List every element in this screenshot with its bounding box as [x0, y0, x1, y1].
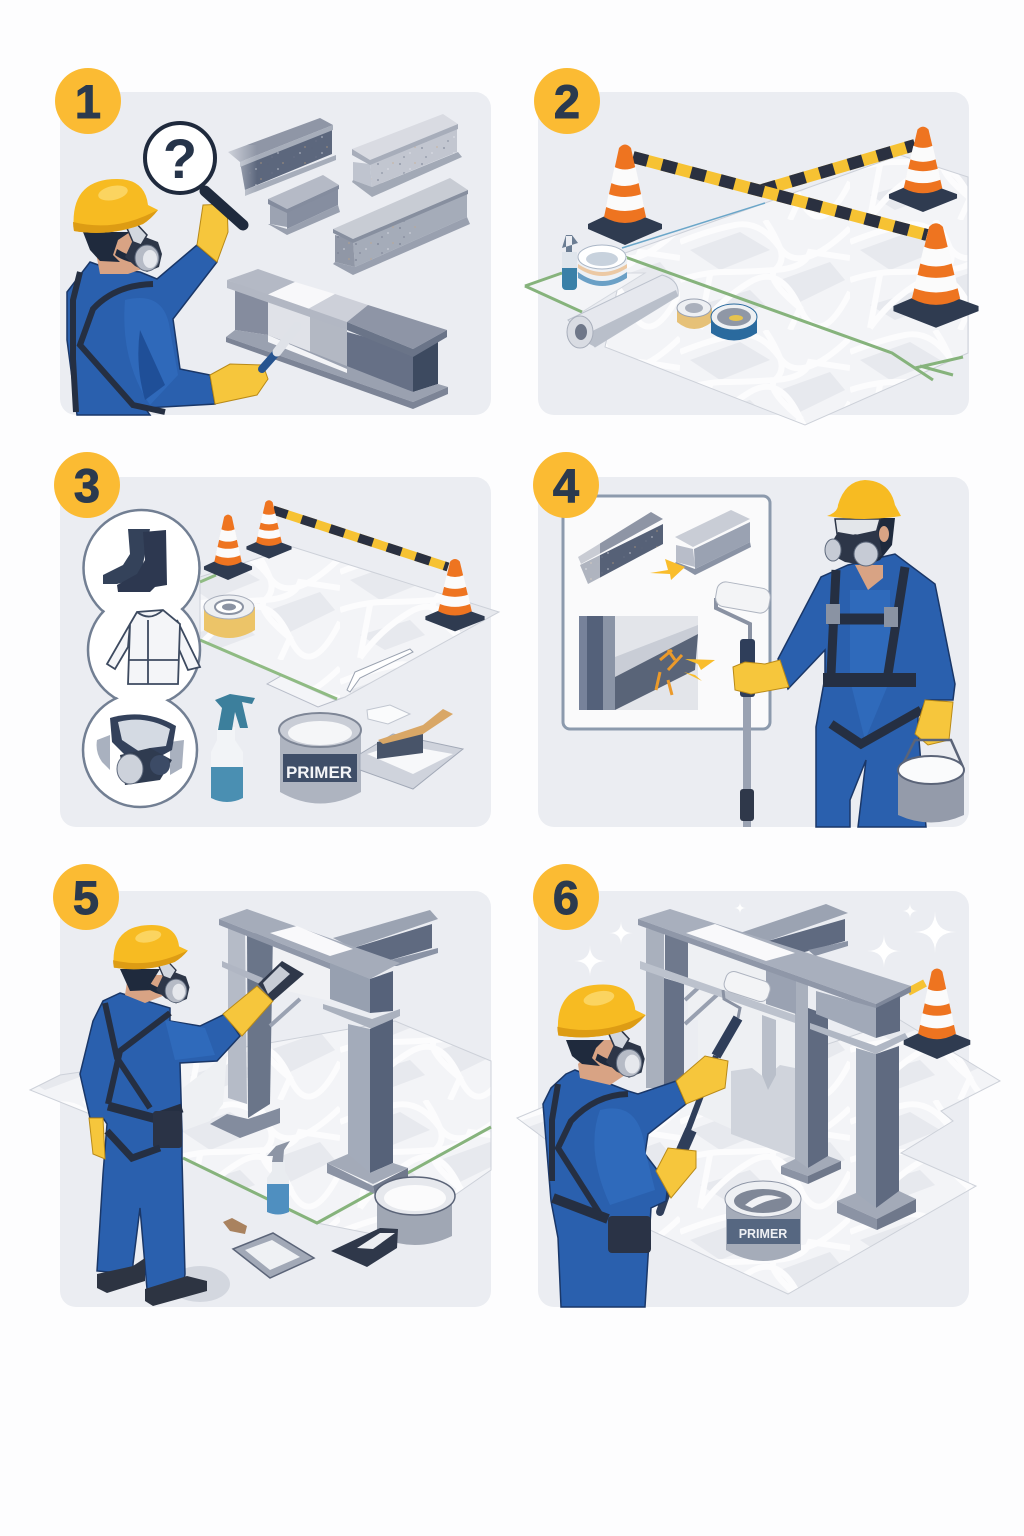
- sheet fold: [347, 649, 413, 692]
- respirator: [595, 1024, 645, 1078]
- main flange: [219, 909, 400, 979]
- badge 1: 1: [75, 75, 101, 128]
- spray bottle: [562, 235, 578, 290]
- badge 4: 4: [553, 459, 579, 512]
- steel frame: [638, 904, 916, 1230]
- panel: step 4 surface preparation: [538, 477, 969, 827]
- primer can: PRIMER: [739, 1227, 787, 1241]
- icon: respirator: [97, 714, 184, 785]
- cross beam: [740, 904, 848, 941]
- primer can: [279, 713, 361, 804]
- inset detail box: [563, 496, 770, 729]
- left column: [228, 926, 247, 1104]
- green tape line: [200, 575, 337, 699]
- green tape lines: [525, 257, 963, 380]
- cross beam: [333, 910, 438, 948]
- cone left: [588, 144, 662, 245]
- under sheet: [267, 665, 345, 707]
- barrier tape: [273, 510, 448, 567]
- tray with brush: [360, 705, 463, 789]
- cone 3: [425, 559, 485, 631]
- ppe circle outlines: [83, 510, 200, 807]
- beam closeup: [579, 616, 698, 710]
- right upper block: [816, 991, 876, 1038]
- steel frame: [210, 909, 438, 1194]
- small beam: [268, 175, 340, 235]
- badge 3: 3: [74, 459, 100, 512]
- scraper tool: [262, 326, 297, 369]
- circle fills merged: [84, 512, 198, 806]
- cone front right: [893, 223, 979, 328]
- small sheet under can: [525, 273, 645, 312]
- panel background: [538, 477, 969, 827]
- head: [97, 232, 145, 274]
- primer bucket: [375, 1177, 455, 1245]
- primed wall: [688, 941, 796, 1158]
- cone back right: [889, 127, 957, 212]
- panel background: [538, 891, 969, 1307]
- sparkles: [574, 902, 956, 977]
- panel background: [538, 92, 969, 415]
- badge 5: 5: [73, 871, 99, 924]
- worker inspecting: [67, 179, 268, 415]
- primer can: PRIMER: [286, 763, 352, 782]
- hard hat: [73, 179, 158, 233]
- draped cloth: [183, 1054, 227, 1131]
- panel: step 2 prepare area: [525, 92, 979, 425]
- roller: [660, 969, 772, 1212]
- right column: [856, 1048, 876, 1208]
- worker applying with brush: [80, 925, 273, 1306]
- boot shadow: [170, 1266, 230, 1302]
- badge 3: [54, 452, 120, 518]
- primer can: [725, 1181, 801, 1261]
- badge 6: [533, 864, 599, 930]
- badge 1: [55, 68, 121, 134]
- panel: step 6 roll primer: [517, 891, 1000, 1307]
- mid band: [640, 961, 798, 1024]
- panel: step 1 inspect steel: [60, 92, 491, 415]
- protective sheet: [517, 1020, 1000, 1294]
- main flange: [638, 909, 911, 1004]
- clean beam: [352, 114, 462, 197]
- head: [578, 1040, 625, 1085]
- gloves: [733, 660, 953, 745]
- icon: boots: [103, 529, 167, 592]
- rusty beam: [215, 118, 336, 200]
- tape roll: [204, 595, 255, 638]
- protective sheet: [200, 547, 499, 700]
- clean beam: [675, 510, 751, 575]
- mid base: [781, 1156, 841, 1176]
- barrier tape: [633, 145, 927, 235]
- badge 2: 2: [554, 75, 580, 128]
- panel background: [60, 891, 491, 1307]
- panel: step 3 gather PPE and materials: [60, 477, 499, 827]
- badge 2: [534, 68, 600, 134]
- icon: white coverall: [107, 610, 200, 684]
- hard hat: [113, 925, 188, 969]
- worker rolling: [543, 985, 728, 1307]
- harness buckles: [826, 604, 898, 627]
- small brush piece: [223, 1218, 247, 1234]
- magnifying glass with question mark: ?: [163, 127, 197, 190]
- yellow arrow right: [684, 659, 715, 681]
- yellow arrow: [650, 559, 685, 580]
- large primed beam: [226, 269, 448, 409]
- right base: [837, 1191, 916, 1219]
- spray bottle: [267, 1141, 290, 1214]
- green tape line: [183, 1127, 491, 1223]
- panel: step 5 stripe coat with brush: [30, 891, 491, 1307]
- paint container: [578, 245, 627, 286]
- hard hat: [557, 985, 646, 1037]
- right column: [348, 1024, 370, 1173]
- protective sheet: [605, 155, 968, 425]
- badge 5: [53, 864, 119, 930]
- hard hat: [827, 480, 901, 519]
- right column base: [327, 1154, 408, 1184]
- badge 4: [533, 452, 599, 518]
- boots: [97, 1258, 207, 1306]
- protective sheet: [30, 1021, 491, 1238]
- head: [125, 975, 170, 1003]
- badge 6: 6: [553, 871, 579, 924]
- braces: [685, 988, 718, 1024]
- spray bottle: [211, 694, 255, 802]
- panel background: [60, 92, 491, 415]
- yellow gloves: [197, 204, 268, 404]
- panel background: [60, 477, 491, 827]
- sparks: [656, 650, 682, 695]
- tool scraper on floor: [331, 1228, 398, 1267]
- magnifying glass with question mark: [145, 123, 243, 225]
- paint bucket: [898, 740, 964, 822]
- mid column: [795, 981, 808, 1168]
- rusty beam: [566, 512, 663, 590]
- worker facing front: [733, 480, 955, 827]
- cone with tape: [904, 969, 970, 1059]
- plastic roll: [567, 275, 678, 348]
- tape roll blue: [711, 304, 757, 340]
- gloves: [89, 986, 273, 1159]
- scraper in hand: [258, 961, 304, 1001]
- respirator: [115, 221, 162, 272]
- cone 1: [204, 515, 252, 580]
- head and respirator: [865, 518, 895, 566]
- whitened web: [273, 941, 330, 1001]
- left column: [646, 928, 664, 1088]
- gloves: [656, 1056, 728, 1198]
- tape roll beige: [677, 299, 712, 329]
- right upper block: [330, 963, 370, 1013]
- speckled beam: [333, 178, 470, 275]
- cone 2: [246, 500, 292, 559]
- blue string line: [622, 203, 765, 248]
- paint tray: [233, 1233, 314, 1278]
- paint roller: [714, 580, 772, 827]
- respirator: [147, 958, 190, 1004]
